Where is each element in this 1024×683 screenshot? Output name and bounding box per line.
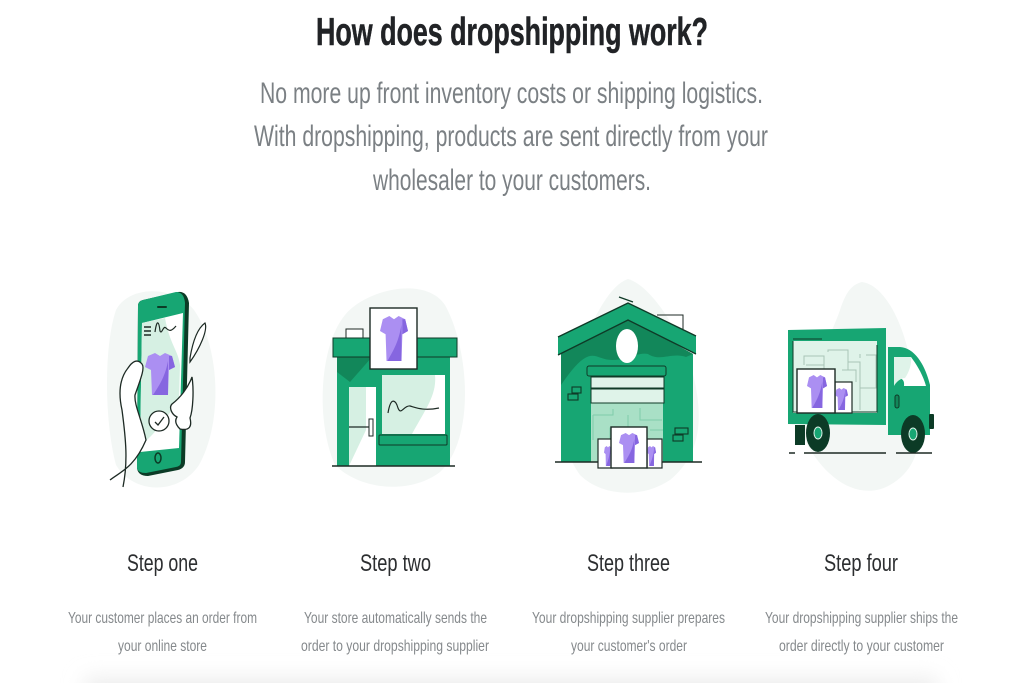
step three: Step three — [587, 550, 670, 577]
illustration: storefront — [323, 288, 465, 487]
illustration: warehouse — [555, 279, 702, 493]
step four: order directly to your customer — [779, 638, 945, 655]
step three: Your dropshipping supplier prepares — [532, 610, 725, 627]
step two: order to your dropshipping supplier — [301, 638, 490, 655]
step three — [532, 550, 725, 655]
intro text — [254, 77, 768, 197]
step three: your customer's order — [571, 638, 688, 655]
intro text: With dropshipping, products are sent directly from your — [254, 120, 768, 153]
step four: Your dropshipping supplier ships the — [765, 610, 958, 627]
step four — [765, 550, 958, 655]
intro text: wholesaler to your customers. — [372, 164, 651, 197]
step two: Step two — [360, 550, 431, 577]
bottom card shadow — [85, 678, 937, 683]
step one: Step one — [127, 550, 198, 577]
step one: your online store — [118, 638, 207, 655]
step two: Your store automatically sends the — [304, 610, 487, 627]
title: How does dropshipping work? — [316, 11, 708, 54]
step two — [301, 550, 490, 655]
step one: Your customer places an order from — [68, 610, 257, 627]
step four: Step four — [824, 550, 898, 577]
intro text: No more up front inventory costs or shipping logistics. — [260, 77, 763, 110]
illustration: delivery truck — [788, 282, 934, 491]
illustration: phone order — [107, 291, 215, 488]
step one — [68, 550, 257, 655]
